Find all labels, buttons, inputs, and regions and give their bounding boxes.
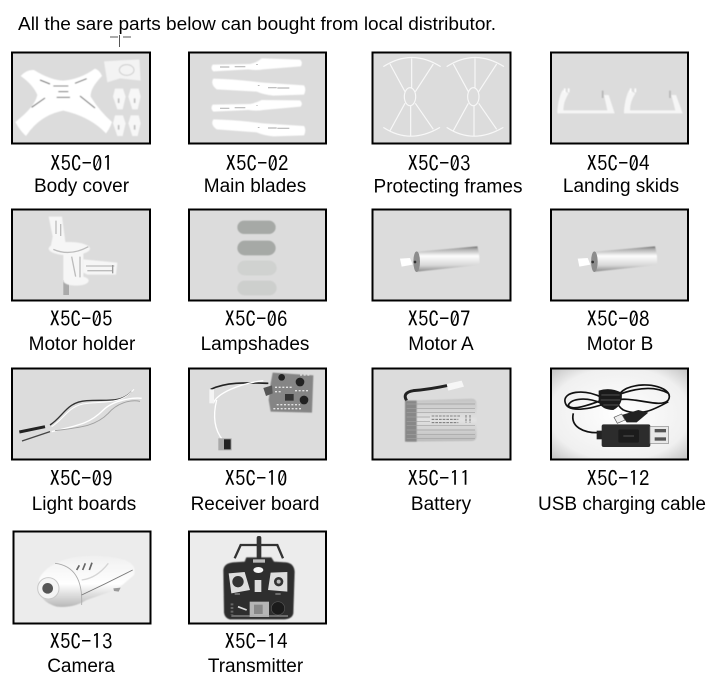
part code: X5C-05 [50, 308, 112, 330]
icon: four main blades [211, 58, 305, 136]
part code: X5C-09 [50, 468, 112, 489]
icon: battery [405, 381, 477, 442]
image frame [189, 210, 326, 300]
part name: USB charging cable [538, 494, 706, 515]
part code: X5C-04 [586, 153, 650, 174]
part name: Landing skids [563, 176, 679, 197]
part code: X5C-10 [224, 468, 288, 489]
icon: protecting frames [383, 57, 504, 136]
part name: Motor B [587, 334, 653, 355]
panel: X5C-05 motor holder [12, 210, 150, 355]
panel: X5C-07 motor A [372, 210, 510, 355]
panel: X5C-10 receiver board [189, 368, 326, 515]
icon: motor B [578, 246, 657, 272]
part code: X5C-14 [224, 631, 288, 652]
part name: Main blades [204, 176, 306, 197]
image frame [551, 210, 688, 300]
image frame [12, 368, 150, 460]
icon: camera [38, 556, 135, 607]
image frame [372, 368, 510, 460]
icon: four lampshades [237, 221, 277, 295]
part name: Camera [47, 656, 115, 677]
image frame [189, 368, 326, 460]
image frame [372, 52, 510, 144]
panel: X5C-02 main blades [189, 52, 326, 197]
image frame [12, 210, 150, 300]
part name: Lampshades [201, 334, 309, 355]
part name: Receiver board [191, 494, 319, 515]
icon: transmitter [223, 536, 295, 619]
image frame [12, 52, 150, 144]
panel: X5C-01 body cover [12, 52, 150, 197]
part code: X5C-06 [224, 308, 288, 330]
part name: Motor A [408, 334, 474, 355]
part name: Body cover [34, 176, 130, 197]
panel: X5C-04 landing skids [551, 52, 688, 197]
part name: Protecting frames [374, 176, 522, 198]
image frame [189, 532, 326, 624]
icon: motor A [400, 246, 479, 272]
icon: motor holder [49, 217, 117, 295]
panel: X5C-11 battery [372, 368, 510, 515]
panel: X5C-06 lampshades [189, 210, 326, 355]
image frame [551, 368, 688, 460]
title: All the sare parts below can bought from local distributor. [18, 13, 496, 34]
part code: X5C-08 [586, 308, 650, 330]
part code: X5C-13 [50, 631, 112, 652]
icon: receiver board [209, 373, 313, 450]
part name: Battery [411, 494, 472, 515]
panel: X5C-14 transmitter [189, 532, 326, 677]
part code: X5C-01 [50, 153, 113, 174]
icon: landing skids [557, 88, 683, 113]
part name: Transmitter [208, 656, 304, 677]
image frame [14, 532, 150, 624]
panel: X5C-12 USB charging cable [538, 368, 706, 515]
panel: X5C-13 camera [14, 532, 150, 677]
image frame [551, 52, 688, 144]
panel: X5C-08 motor B [551, 210, 688, 355]
icon: light boards [19, 389, 142, 441]
part code: X5C-11 [408, 468, 470, 489]
part code: X5C-03 [408, 153, 470, 174]
part name: Motor holder [29, 334, 136, 355]
icon: USB charging cable [565, 385, 669, 447]
part code: X5C-07 [408, 308, 470, 330]
image frame [189, 52, 326, 144]
part code: X5C-12 [586, 468, 650, 489]
part name: Light boards [32, 494, 136, 515]
registration mark under title [110, 35, 131, 47]
icon: body cover parts [15, 59, 141, 136]
panel: X5C-03 protecting frames [372, 52, 522, 198]
part code: X5C-02 [226, 153, 288, 174]
panel: X5C-09 light boards [12, 368, 150, 515]
image frame [372, 210, 510, 300]
